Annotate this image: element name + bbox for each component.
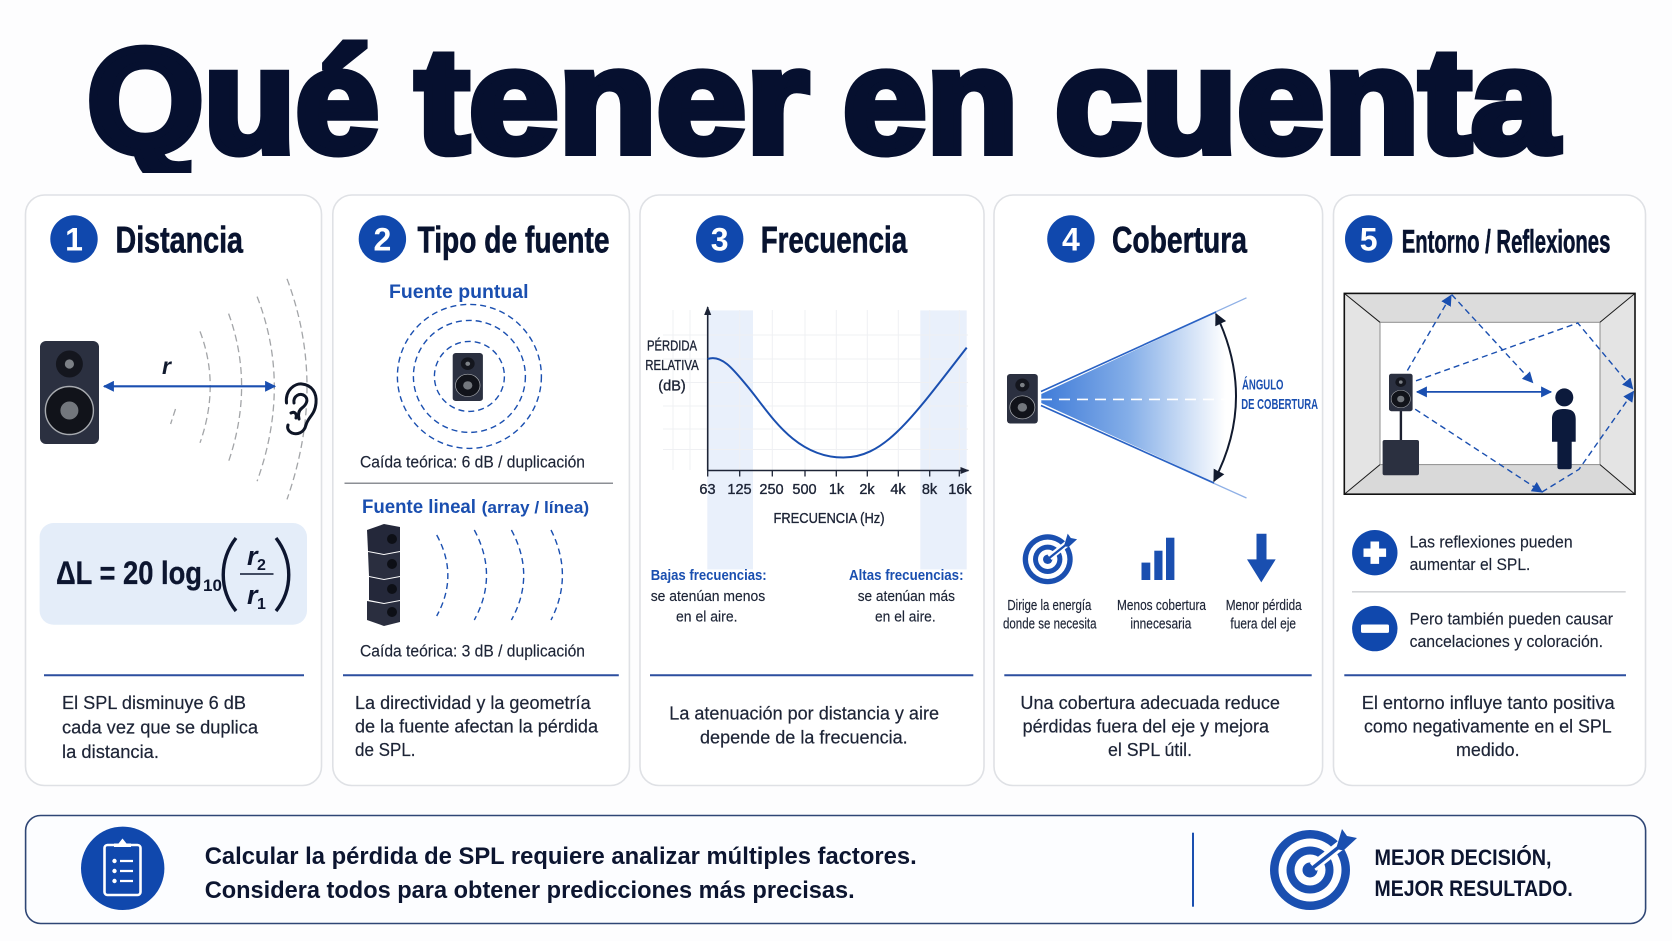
number badge 5: [1345, 215, 1392, 263]
number badge 1: 1: [65, 222, 83, 258]
title: [89, 40, 1564, 173]
title: en: [843, 19, 1018, 184]
line chart: pérdida vs frecuencia: 1k: [829, 482, 845, 498]
title: Qué: [87, 19, 379, 184]
line chart: pérdida vs frecuencia: 500: [792, 482, 817, 498]
line chart: pérdida vs frecuencia: PÉRDIDA: [647, 337, 697, 354]
formula box: r: [247, 580, 259, 610]
note: altas frecuencias: en el aire.: [875, 610, 936, 626]
heading: Tipo de fuente: Tipo de fuente: [418, 220, 610, 261]
formula box: 10: [203, 576, 222, 595]
note: altas frecuencias: se atenúan más: [858, 589, 955, 605]
formula box: [40, 523, 307, 625]
note: bajas frecuencias: [651, 567, 767, 626]
icon: line array: [367, 524, 400, 626]
text: cobertura summary: Una cobertura adecuada reduce: [1020, 692, 1280, 713]
caption: menos cobertura: [1117, 598, 1207, 633]
text: entorno summary: como negativamente en el SPL: [1364, 716, 1612, 737]
formula box: r: [247, 541, 259, 571]
text: reflexiones cancelan: [1410, 611, 1613, 651]
label: angulo de cobertura: ÁNGULO: [1242, 376, 1284, 394]
label: fuente lineal: Fuente lineal: [362, 496, 476, 518]
line chart: pérdida vs frecuencia: 2k: [859, 482, 875, 498]
heading: Frecuencia: Frecuencia: [761, 220, 908, 261]
number badge 3: [696, 215, 743, 263]
number badge 5: 5: [1360, 222, 1378, 258]
panel: cobertura: [994, 195, 1323, 786]
number badge 3: 3: [711, 222, 729, 258]
text: cobertura summary: [1020, 692, 1280, 760]
panel: frecuencia: [640, 195, 984, 786]
point source circles: [397, 304, 541, 448]
title: tener: [416, 19, 808, 184]
line chart: pérdida vs frecuencia: (dB): [658, 379, 686, 395]
label: fuente lineal: [362, 496, 589, 518]
heading: Cobertura: Cobertura: [1112, 220, 1247, 261]
panel: tipo de fuente: [333, 195, 629, 786]
text: distancia summary: la distancia.: [62, 741, 159, 762]
text: frecuencia summary: [669, 702, 939, 747]
caption: 3 dB: Caída teórica: 3 dB / duplicación: [360, 642, 585, 660]
icon: target: [1023, 534, 1077, 584]
caption: menor perdida: fuera del eje: [1230, 617, 1296, 633]
heading: Distancia: Distancia: [116, 220, 243, 261]
text: cobertura summary: el SPL útil.: [1108, 739, 1192, 760]
text: distancia summary: [62, 692, 259, 762]
icon: speaker: [40, 341, 99, 444]
text: reflexiones cancelan: Pero también pueden causar: [1410, 611, 1613, 629]
text: fuente summary: de SPL.: [355, 739, 416, 760]
formula box: 2: [257, 557, 266, 574]
note: bajas frecuencias: Bajas frecuencias:: [651, 567, 767, 584]
line chart: pérdida vs frecuencia: 8k: [922, 482, 938, 498]
line chart: pérdida vs frecuencia: 16k: [948, 482, 972, 498]
title: cuenta: [1055, 19, 1560, 184]
arrow: distance r: [104, 385, 275, 387]
text: distancia summary: cada vez que se duplica: [62, 716, 259, 737]
icon: plus: [1352, 530, 1398, 575]
note: bajas frecuencias: se atenúan menos: [651, 589, 765, 605]
sound wave arcs: [171, 279, 307, 499]
text: fuente summary: La directividad y la geometría: [355, 692, 591, 713]
caption: menos cobertura: Menos cobertura: [1117, 598, 1207, 614]
line chart: pérdida vs frecuencia: FRECUENCIA (Hz): [774, 511, 884, 527]
icon: speaker: [1007, 374, 1038, 423]
caption: dirige la energia: donde se necesita: [1003, 617, 1097, 633]
label r: r: [162, 353, 172, 379]
label: angulo de cobertura: DE COBERTURA: [1241, 396, 1318, 413]
icon: speaker small: [453, 353, 483, 401]
room diagram: [1344, 293, 1635, 494]
text: reflexiones aumentan: Las reflexiones pueden: [1410, 534, 1573, 552]
note: bajas frecuencias: en el aire.: [676, 610, 738, 626]
line source wave arcs: [437, 530, 562, 620]
text: cobertura summary: pérdidas fuera del eje y mejora: [1023, 716, 1270, 737]
line chart: pérdida vs frecuencia: 63: [699, 482, 716, 498]
caption: dirige la energia: [1003, 598, 1097, 633]
note: altas frecuencias: [849, 567, 964, 626]
text: fuente summary: [355, 692, 599, 760]
formula box: ΔL = 20 log: [56, 555, 202, 591]
line chart: pérdida vs frecuencia: 4k: [890, 482, 906, 498]
banner message: [205, 843, 917, 904]
line chart: pérdida vs frecuencia: 250: [759, 482, 784, 498]
text: entorno summary: [1362, 692, 1615, 760]
text: reflexiones cancelan: cancelaciones y coloración.: [1410, 633, 1603, 651]
number badge 4: [1047, 215, 1095, 263]
label: fuente lineal: (array / línea): [482, 498, 589, 517]
number badge 2: 2: [374, 222, 391, 258]
panel: entorno / reflexiones: [1334, 195, 1646, 786]
icon: target large: [1270, 829, 1357, 910]
formula box: 1: [257, 596, 266, 613]
icon: bars: [1142, 538, 1174, 580]
text: reflexiones aumentan: aumentar el SPL.: [1410, 556, 1530, 574]
bottom banner: [26, 816, 1646, 924]
number badge 1: [50, 215, 98, 263]
line chart: pérdida vs frecuencia: 125: [727, 482, 752, 498]
caption: menor perdida: [1226, 598, 1302, 633]
caption: menos cobertura: innecesaria: [1130, 617, 1192, 633]
text: frecuencia summary: La atenuación por distancia y aire: [669, 702, 939, 724]
panel: distancia: [26, 195, 322, 786]
icon: down arrow: [1247, 534, 1276, 582]
icon: clipboard: [81, 827, 164, 910]
banner slogan: [1374, 845, 1573, 901]
number badge 2: [359, 215, 406, 263]
caption: dirige la energia: Dirige la energía: [1007, 598, 1092, 614]
icon: minus: [1352, 606, 1398, 651]
caption: 6 dB: Caída teórica: 6 dB / duplicación: [360, 453, 585, 471]
text: frecuencia summary: depende de la frecuencia.: [700, 726, 908, 747]
text: entorno summary: medido.: [1456, 739, 1520, 760]
icon: ear: [286, 384, 316, 434]
banner message: Calcular la pérdida de SPL requiere analizar múltiples factores.: [205, 843, 917, 870]
coverage cone diagram: [1041, 298, 1246, 498]
line chart: pérdida vs frecuencia: [645, 307, 972, 569]
banner slogan: MEJOR RESULTADO.: [1374, 876, 1573, 901]
line chart: pérdida vs frecuencia: RELATIVA: [645, 358, 699, 374]
caption: menor perdida: Menor pérdida: [1226, 598, 1302, 614]
number badge 4: 4: [1062, 222, 1080, 258]
text: reflexiones aumentan: [1410, 534, 1573, 574]
banner message: Considera todos para obtener predicciones más precisas.: [205, 877, 855, 904]
text: entorno summary: El entorno influye tanto positiva: [1362, 692, 1615, 713]
note: altas frecuencias: Altas frecuencias:: [849, 567, 964, 584]
label: fuente puntual: Fuente puntual: [389, 281, 528, 303]
banner slogan: MEJOR DECISIÓN,: [1374, 845, 1552, 870]
label: angulo de cobertura: [1241, 376, 1318, 413]
text: distancia summary: El SPL disminuye 6 dB: [62, 692, 246, 713]
text: fuente summary: de la fuente afectan la pérdida: [355, 716, 599, 737]
